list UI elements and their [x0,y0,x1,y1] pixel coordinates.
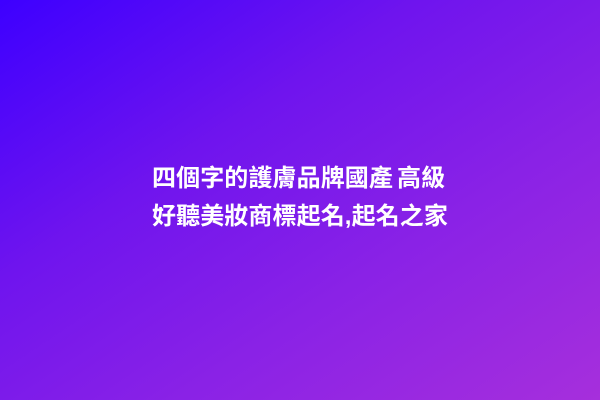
title: 四個字的護膚品牌國產 高級 [152,165,445,192]
title: 好聽美妝商標起名,起名之家 [152,203,448,230]
title [152,165,448,230]
